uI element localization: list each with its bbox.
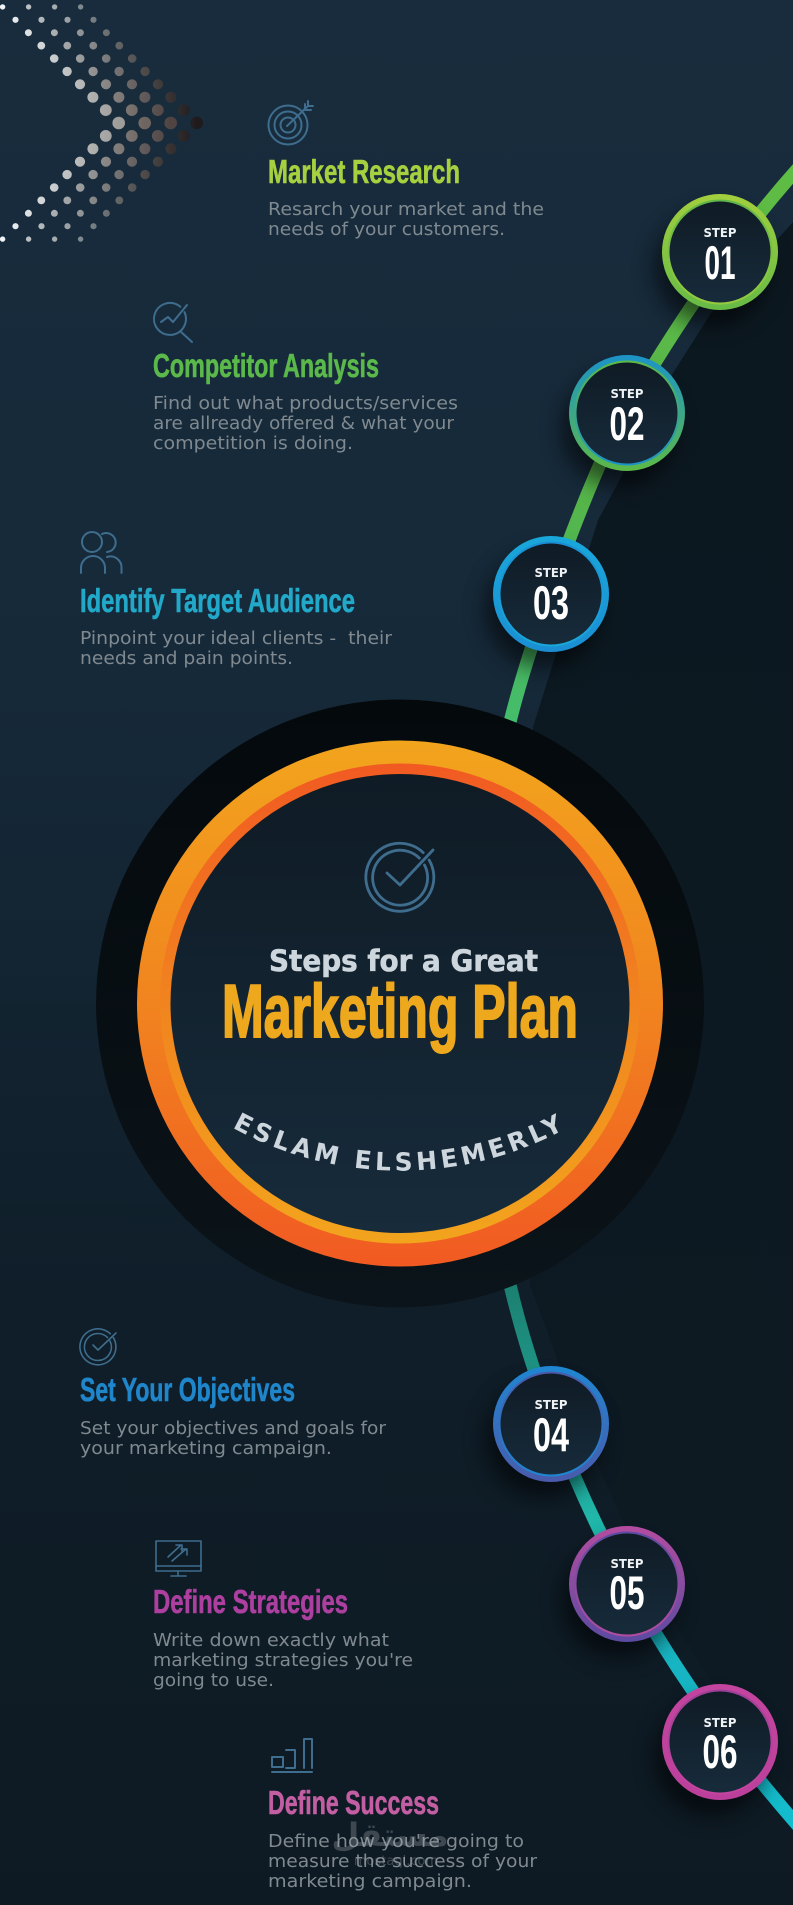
black disc [96,700,704,1308]
panel: step 1 text [268,101,544,240]
outer orange ring [137,740,663,1266]
watermark: مستقل [331,1816,449,1854]
step 3 badge: 03 [533,576,569,629]
step 5 badge: STEP [610,1556,644,1571]
text: set your objectives description [80,1419,387,1459]
panel: step 2 text [153,303,458,454]
step 5 badge: 05 [610,1566,644,1619]
step 4 badge: STEP [534,1397,568,1412]
upper connecting line [510,166,793,722]
step 3 badge: STEP [534,565,568,580]
panel: step 4 text [80,1329,387,1459]
text: define strategies description: marketing strategies you're [153,1651,413,1671]
heading: define success: Define Success [268,1784,439,1821]
text: define success description: marketing campaign. [268,1872,472,1892]
step 2 badge: STEP [610,386,644,401]
icon: people [81,532,122,573]
icon: check circle [80,1329,116,1365]
step 6 badge: 06 [702,1725,738,1778]
panel: step 5 text [153,1541,413,1691]
lower connecting line [505,1262,793,1828]
title line one: Steps for a Great [269,944,538,978]
step 1 badge [654,194,778,326]
panel: step 3 text [80,532,393,669]
central badge [96,700,704,1308]
text: define strategies description: Write down exactly what [153,1631,389,1651]
heading: identify target audience: Identify Target Audience [80,582,355,619]
text: market research description: Resarch your market and the [268,200,544,220]
step 4 badge [485,1366,609,1498]
dark diagonal area right of the path [530,222,793,1790]
text: define success description [268,1832,538,1892]
text: define strategies description [153,1631,413,1691]
step 3 badge [485,536,609,668]
step 1 badge: STEP [704,225,736,240]
text: market research description [268,200,544,240]
text: define strategies description: going to use. [153,1671,274,1691]
icon: target [268,101,313,144]
text: identify target audience description: Pinpoint your ideal clients - their [80,629,393,649]
text: competitor analysis description: are allready offered & what your [153,414,455,434]
heading: competitor analysis: Competitor Analysis [153,347,379,384]
text: competitor analysis description: competition is doing. [153,434,353,454]
heading: set your objectives: Set Your Objectives [80,1371,295,1408]
step 1 badge: 01 [704,236,736,289]
text: define success description: measure the success of your [268,1852,538,1872]
watermark: mostaql.com [354,1854,438,1869]
text: identify target audience description: needs and pain points. [80,649,293,669]
step 4 badge: 04 [533,1408,569,1461]
icon: monitor with arrows [156,1541,201,1576]
text: competitor analysis description: Find out what products/services [153,394,458,414]
text: set your objectives description: Set your objectives and goals for [80,1419,387,1439]
text: identify target audience description [80,629,393,669]
panel: step 6 text [268,1739,538,1892]
step 2 badge [561,355,685,487]
text: define success description: Define how you're going to [268,1832,524,1852]
heading: define strategies: Define Strategies [153,1583,348,1620]
step 5 badge [561,1526,685,1658]
icon: check circle [366,843,434,911]
inner orange ring [160,764,640,1244]
text: set your objectives description: your marketing campaign. [80,1439,332,1459]
text: market research description: needs of your customers. [268,220,505,240]
text: competitor analysis description [153,394,458,454]
step 6 badge: STEP [704,1715,736,1730]
title line two: Marketing Plan [222,969,578,1053]
icon: magnifier with chart [154,303,192,342]
decorative dotted chevron [0,4,203,242]
heading: market research: Market Research [268,153,460,190]
step 2 badge: 02 [610,397,644,450]
step 6 badge [654,1684,778,1816]
icon: bar chart [272,1739,312,1772]
inner dark disc [170,774,630,1233]
author name on arc: ESLAM ELSHEMERLY [234,1112,558,1171]
